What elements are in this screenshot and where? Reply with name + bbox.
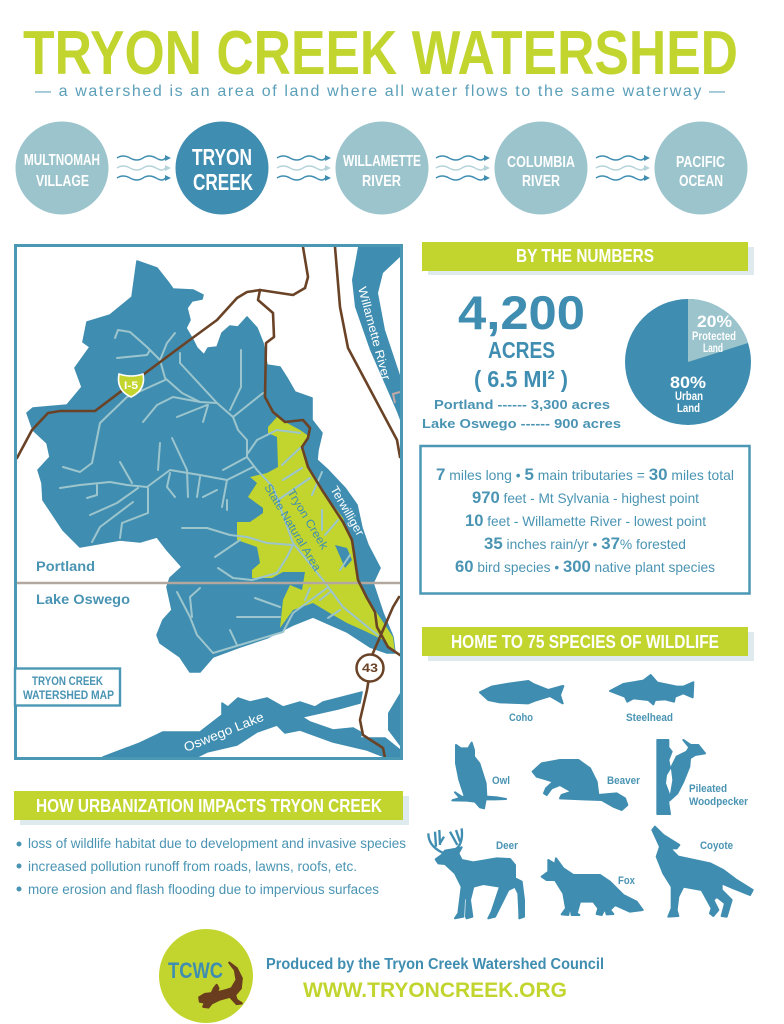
icon: owl — [452, 743, 506, 808]
species labels: Beaver — [607, 775, 641, 787]
species labels: Owl — [492, 775, 510, 787]
logo: TCWC: TCWC — [168, 958, 223, 983]
icon: pileated woodpecker — [657, 740, 705, 814]
flow diagram: watershed path to the ocean — [16, 122, 748, 214]
map legend box — [15, 668, 120, 706]
streams — [60, 330, 380, 653]
arrow: flow 1 — [117, 155, 171, 181]
pie chart: land use: Protected — [692, 329, 736, 343]
node: Willamette River: RIVER — [362, 173, 401, 190]
heading: by the numbers: BY THE NUMBERS — [516, 246, 654, 266]
pie chart: land use: Land — [677, 401, 700, 415]
subtitle: — a watershed is an area of land where all water flows to the same waterway — — [35, 83, 725, 100]
urbanization impact list: more erosion and flash flooding due to impervious surfaces — [28, 882, 379, 897]
arrow: flow 2 — [277, 155, 331, 181]
icon: deer — [428, 828, 524, 918]
map legend box: WATERSHED MAP — [23, 688, 114, 702]
watershed area — [27, 261, 395, 672]
label: Terwilliger: Terwilliger — [327, 484, 367, 538]
urbanization impact list — [16, 836, 406, 897]
icon: salamander — [199, 963, 242, 1007]
heading: by the numbers — [422, 242, 754, 275]
node: Multnomah Village: VILLAGE — [36, 173, 89, 190]
node: Columbia River — [494, 122, 588, 214]
node: Tryon Creek: TRYON — [192, 144, 252, 170]
icon: fox — [542, 858, 643, 915]
node: Willamette River — [336, 122, 428, 214]
road: Terwilliger — [258, 290, 400, 655]
panel: watershed map — [15, 246, 402, 758]
road: Highway 43 — [360, 597, 399, 758]
node: Pacific Ocean — [654, 122, 748, 214]
node: Tryon Creek: CREEK — [193, 169, 253, 195]
icon: beaver — [533, 760, 627, 810]
stat: acreage — [422, 286, 621, 431]
Highway 43 badge: 43 — [362, 661, 378, 675]
pie chart: land use: 80% — [670, 373, 706, 392]
panel: key facts — [420, 446, 750, 594]
arrow: flow 4 — [596, 155, 650, 181]
node: Columbia River: COLUMBIA — [507, 154, 575, 171]
panel: key facts: 60 bird species • 300 native plant species — [455, 557, 715, 576]
boundary tick by river — [393, 392, 400, 403]
pie chart: land use: 20% — [697, 312, 732, 331]
panel: key facts: 970 feet - Mt Sylvania - highest point — [472, 488, 699, 507]
Highway 43 badge — [356, 654, 384, 682]
Willamette River — [352, 247, 400, 420]
label: Willamette River: Willamette River — [355, 285, 393, 382]
urbanization impact list: increased pollution runoff from roads, lawns, roofs, etc. — [28, 859, 357, 874]
stat: acreage: ( 6.5 MI² ) — [474, 366, 568, 392]
species labels: Steelhead — [626, 712, 673, 724]
pie chart: land use: Land — [703, 341, 723, 355]
label: Portland: Portland — [36, 559, 95, 574]
arrow: flow 3 — [436, 155, 490, 181]
road: east side — [335, 247, 400, 457]
panel: key facts: 10 feet - Willamette River - lowest point — [465, 511, 706, 530]
species labels: Fox — [618, 875, 636, 887]
species labels: Deer — [496, 840, 519, 852]
node: Multnomah Village: MULTNOMAH — [24, 152, 100, 169]
urbanization impact list: loss of wildlife habitat due to development and invasive species — [28, 836, 406, 851]
heading: urbanization impacts: HOW URBANIZATION IMPACTS TRYON CREEK — [36, 796, 382, 816]
label: Lake Oswego: Lake Oswego — [36, 592, 130, 607]
stat: acreage: 4,200 — [458, 286, 585, 339]
node: Multnomah Village — [16, 122, 108, 214]
wildlife silhouettes — [428, 675, 753, 918]
species labels: Coho — [509, 712, 533, 724]
node: Tryon Creek — [176, 122, 268, 214]
stat: acreage: ACRES — [488, 337, 555, 363]
icon: coyote — [652, 827, 753, 917]
pie chart: land use — [625, 299, 751, 425]
species labels: Woodpecker — [689, 796, 749, 808]
website: WWW.TRYONCREEK.ORG — [303, 979, 567, 1002]
node: Willamette River: WILLAMETTE — [343, 153, 421, 170]
panel: key facts: 35 inches rain/yr • 37% forested — [484, 534, 686, 553]
I-5 shield: I-5 — [124, 380, 138, 392]
Oswego Lake — [103, 692, 400, 757]
node: Pacific Ocean: OCEAN — [679, 173, 723, 190]
map border — [16, 246, 402, 758]
species labels: Coyote — [700, 840, 733, 852]
icon: coho — [480, 681, 563, 703]
heading: wildlife — [422, 627, 754, 661]
logo: TCWC — [159, 929, 253, 1023]
species labels: Pileated — [689, 783, 727, 795]
label: Tryon Creek: Tryon Creek — [284, 487, 330, 552]
state natural area — [237, 417, 395, 653]
I-5 shield — [118, 374, 144, 397]
heading: urbanization impacts — [14, 791, 409, 825]
node: Columbia River: RIVER — [522, 173, 560, 190]
stat: acreage: Portland ------ 3,300 acres — [434, 397, 610, 412]
city boundary line — [17, 582, 400, 584]
pie chart: land use: Urban — [675, 389, 703, 403]
species labels — [492, 712, 749, 887]
label: State Natural Area: State Natural Area — [261, 482, 323, 574]
notch in state natural area — [335, 545, 352, 568]
label: Oswego Lake: Oswego Lake — [182, 709, 266, 755]
icon: steelhead — [610, 675, 693, 704]
Oswego Lake east arm — [388, 693, 400, 746]
road: I-5 — [17, 247, 308, 458]
stat: acreage: Lake Oswego ------ 900 acres — [422, 416, 621, 431]
map legend box: TRYON CREEK — [32, 674, 103, 688]
heading: wildlife: HOME TO 75 SPECIES OF WILDLIFE — [451, 632, 719, 652]
credit line: Produced by the Tryon Creek Watershed Council — [266, 956, 604, 973]
panel: key facts: 7 miles long • 5 main tributaries = 30 miles total — [436, 465, 734, 484]
node: Pacific Ocean: PACIFIC — [676, 154, 725, 171]
